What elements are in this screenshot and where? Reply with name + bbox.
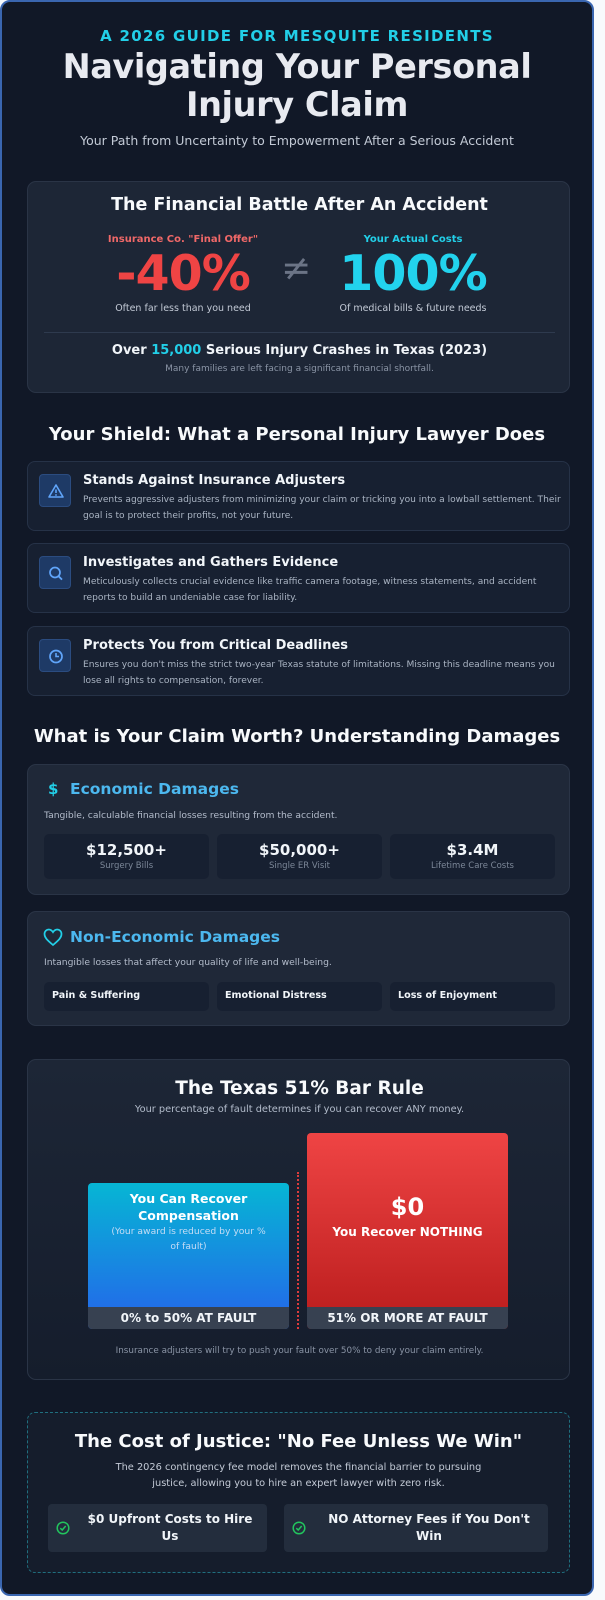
justice desc: The 2026 contingency fee model removes the financial barrier to pursuing justice, allowing you to hire an expert lawyer with zero risk. xyxy=(116,1462,481,1488)
non-econ title: Non-Economic Damages xyxy=(70,928,280,946)
card: deadlines: Protects You from Critical Deadlines xyxy=(83,638,348,653)
bar: recover: (Your award is reduced by your % of fault) xyxy=(111,1226,266,1252)
panel: non-economic damages xyxy=(27,911,570,1026)
divider line: 51% threshold xyxy=(297,1172,299,1329)
econ title: Economic Damages xyxy=(70,780,239,798)
panel: 51% bar rule xyxy=(27,1059,570,1380)
stat: insurance offer xyxy=(108,234,258,314)
icon: heart xyxy=(44,928,62,946)
bar: recover nothing: You Recover NOTHING xyxy=(332,1225,483,1239)
stat: insurance offer: Often far less than you need xyxy=(115,303,251,314)
icon: warning xyxy=(39,474,71,507)
panel: cost of justice xyxy=(27,1412,570,1573)
card: stands against adjusters: Stands Against Insurance Adjusters xyxy=(83,473,345,488)
benefit: no fees xyxy=(284,1504,548,1552)
stat: lifetime: $3.4M xyxy=(447,841,498,859)
card: investigates: Investigates and Gathers Evidence xyxy=(83,555,338,570)
tagline: A 2026 GUIDE FOR MESQUITE RESIDENTS xyxy=(100,27,494,45)
crash note: Many families are left facing a significant financial shortfall. xyxy=(165,364,434,374)
bar rule title: The Texas 51% Bar Rule xyxy=(175,1078,424,1099)
bar: recover: 0% to 50% AT FAULT xyxy=(121,1311,256,1325)
bar rule subtitle: Your percentage of fault determines if you can recover ANY money. xyxy=(135,1104,464,1115)
card: investigates: Meticulously collects crucial evidence like traffic camera footage, witness statements, and accident reports to build an undeniable case for liability. xyxy=(83,577,536,603)
title: Injury Claim xyxy=(186,85,408,124)
benefit: no upfront xyxy=(48,1504,267,1552)
non-econ desc: Intangible losses that affect your quality of life and well-being. xyxy=(44,957,332,968)
stat: ER xyxy=(217,834,382,879)
stat: insurance offer: Insurance Co. "Final Offer" xyxy=(108,234,258,245)
stat: actual costs: Your Actual Costs xyxy=(364,234,462,245)
icon: clock xyxy=(39,639,71,672)
subtitle: Your Path from Uncertainty to Empowerment After a Serious Accident xyxy=(80,133,514,148)
stat: surgery xyxy=(44,834,209,879)
stat: surgery: Surgery Bills xyxy=(100,861,153,871)
heading: claim worth: What is Your Claim Worth? Understanding Damages xyxy=(34,726,560,747)
stat: ER: Single ER Visit xyxy=(269,861,330,871)
benefit: no fees: NO Attorney Fees if You Don't Win xyxy=(328,1512,530,1543)
panel title: The Financial Battle After An Accident xyxy=(111,195,488,215)
crash stat: Over 15,000 Serious Injury Crashes in Texas (2023) xyxy=(112,343,487,358)
bar rule footnote: Insurance adjusters will try to push your fault over 50% to deny your claim entirely. xyxy=(116,1346,483,1356)
card: deadlines xyxy=(27,626,570,696)
card: deadlines: Ensures you don't miss the strict two-year Texas statute of limitations. Missing this deadline means you lose all rights to compensation, forever. xyxy=(83,660,555,686)
panel: financial battle xyxy=(27,181,570,393)
icon: dollar: $ xyxy=(48,780,58,798)
stat: actual costs: 100% xyxy=(339,245,487,302)
bar: recover: Compensation xyxy=(138,1208,239,1223)
item: enjoyment: Loss of Enjoyment xyxy=(398,990,497,1001)
bar: recover: You Can Recover xyxy=(130,1191,247,1206)
title: Navigating Your Personal xyxy=(63,47,531,86)
stat: insurance offer: -40% xyxy=(116,245,250,302)
item: pain: Pain & Suffering xyxy=(52,990,140,1001)
stat: lifetime xyxy=(390,834,555,879)
stat: lifetime: Lifetime Care Costs xyxy=(431,861,514,871)
item: enjoyment xyxy=(390,982,555,1011)
card: stands against adjusters xyxy=(27,461,570,531)
benefit: no upfront: $0 Upfront Costs to Hire Us xyxy=(88,1512,252,1543)
stat: surgery: $12,500+ xyxy=(86,841,167,859)
item: emotional: Emotional Distress xyxy=(225,990,327,1001)
item: pain xyxy=(44,982,209,1011)
panel: economic damages xyxy=(27,764,570,895)
item: emotional xyxy=(217,982,382,1011)
bar: recover xyxy=(88,1183,289,1329)
bar: recover nothing: $0 xyxy=(391,1193,424,1221)
icon: magnifier xyxy=(39,556,71,589)
bar: recover nothing: 51% OR MORE AT FAULT xyxy=(327,1311,488,1325)
justice title: The Cost of Justice: "No Fee Unless We Win" xyxy=(75,1431,522,1452)
not equal sign: ≠ xyxy=(281,248,311,289)
stat: ER: $50,000+ xyxy=(259,841,340,859)
bar: recover nothing xyxy=(307,1133,508,1329)
stat: actual costs: Of medical bills & future needs xyxy=(339,303,487,314)
heading: your shield: Your Shield: What a Personal Injury Lawyer Does xyxy=(49,424,545,445)
card: stands against adjusters: Prevents aggressive adjusters from minimizing your claim or tricking you into a lowball settlement. Their goal is to protect their profits, not your future. xyxy=(83,495,561,521)
title xyxy=(63,47,531,124)
card: investigates xyxy=(27,543,570,613)
econ desc: Tangible, calculable financial losses resulting from the accident. xyxy=(44,810,337,821)
